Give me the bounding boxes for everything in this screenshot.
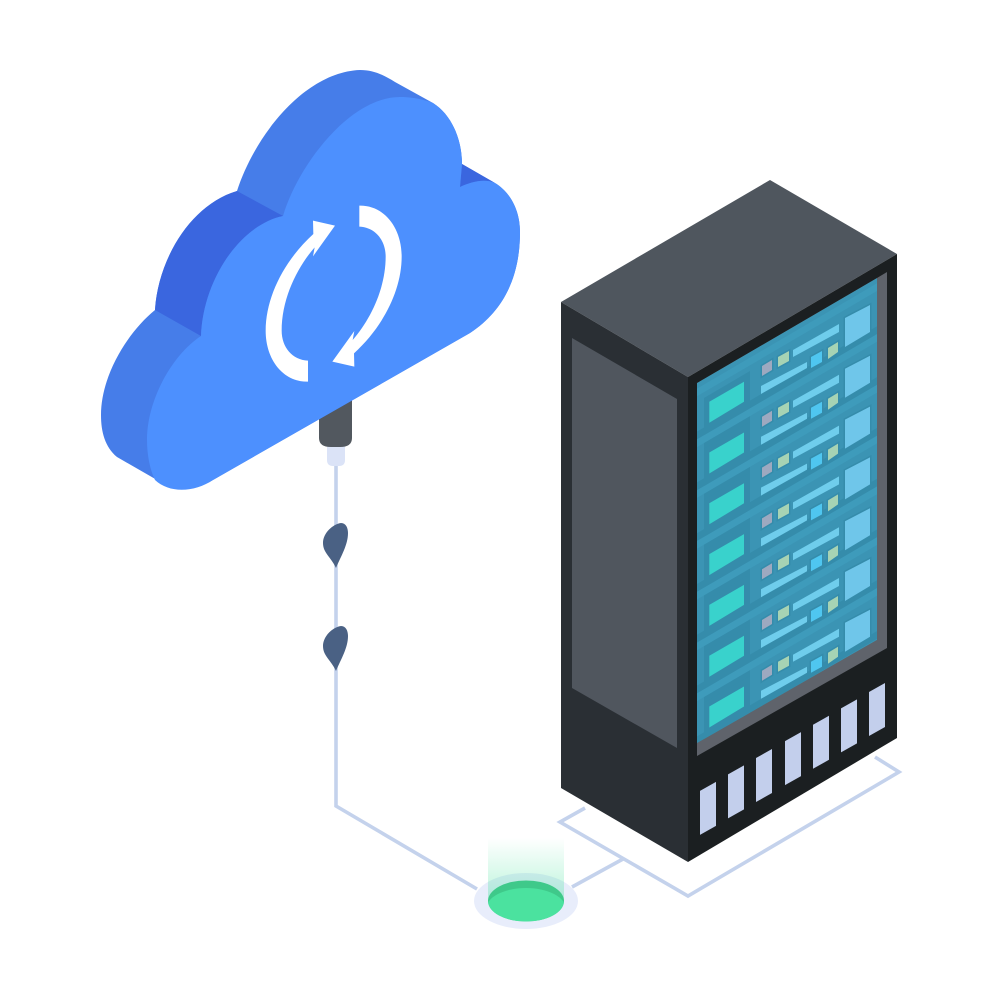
server top face <box>561 180 897 377</box>
server right face <box>688 254 897 862</box>
cloud side face <box>101 70 520 489</box>
screen glass frame <box>697 272 887 756</box>
connection lines from cloud to hub and server base <box>336 465 899 896</box>
illustration: cloud connected to server rack <box>101 70 902 929</box>
server rack <box>561 180 897 862</box>
icon: cloud <box>101 70 520 490</box>
cloud dark side facets <box>155 164 495 336</box>
icon: sync arrows <box>266 206 402 382</box>
server side panel <box>572 338 677 748</box>
cloud front face <box>147 97 520 490</box>
server left face <box>561 302 688 862</box>
ventilation slots <box>700 683 885 835</box>
connector plug under cloud <box>319 400 352 466</box>
icon: data drop upper <box>323 523 348 568</box>
hub: green glowing node <box>474 838 578 930</box>
icon: data drop lower <box>323 626 348 671</box>
screen with server rows <box>697 278 877 756</box>
